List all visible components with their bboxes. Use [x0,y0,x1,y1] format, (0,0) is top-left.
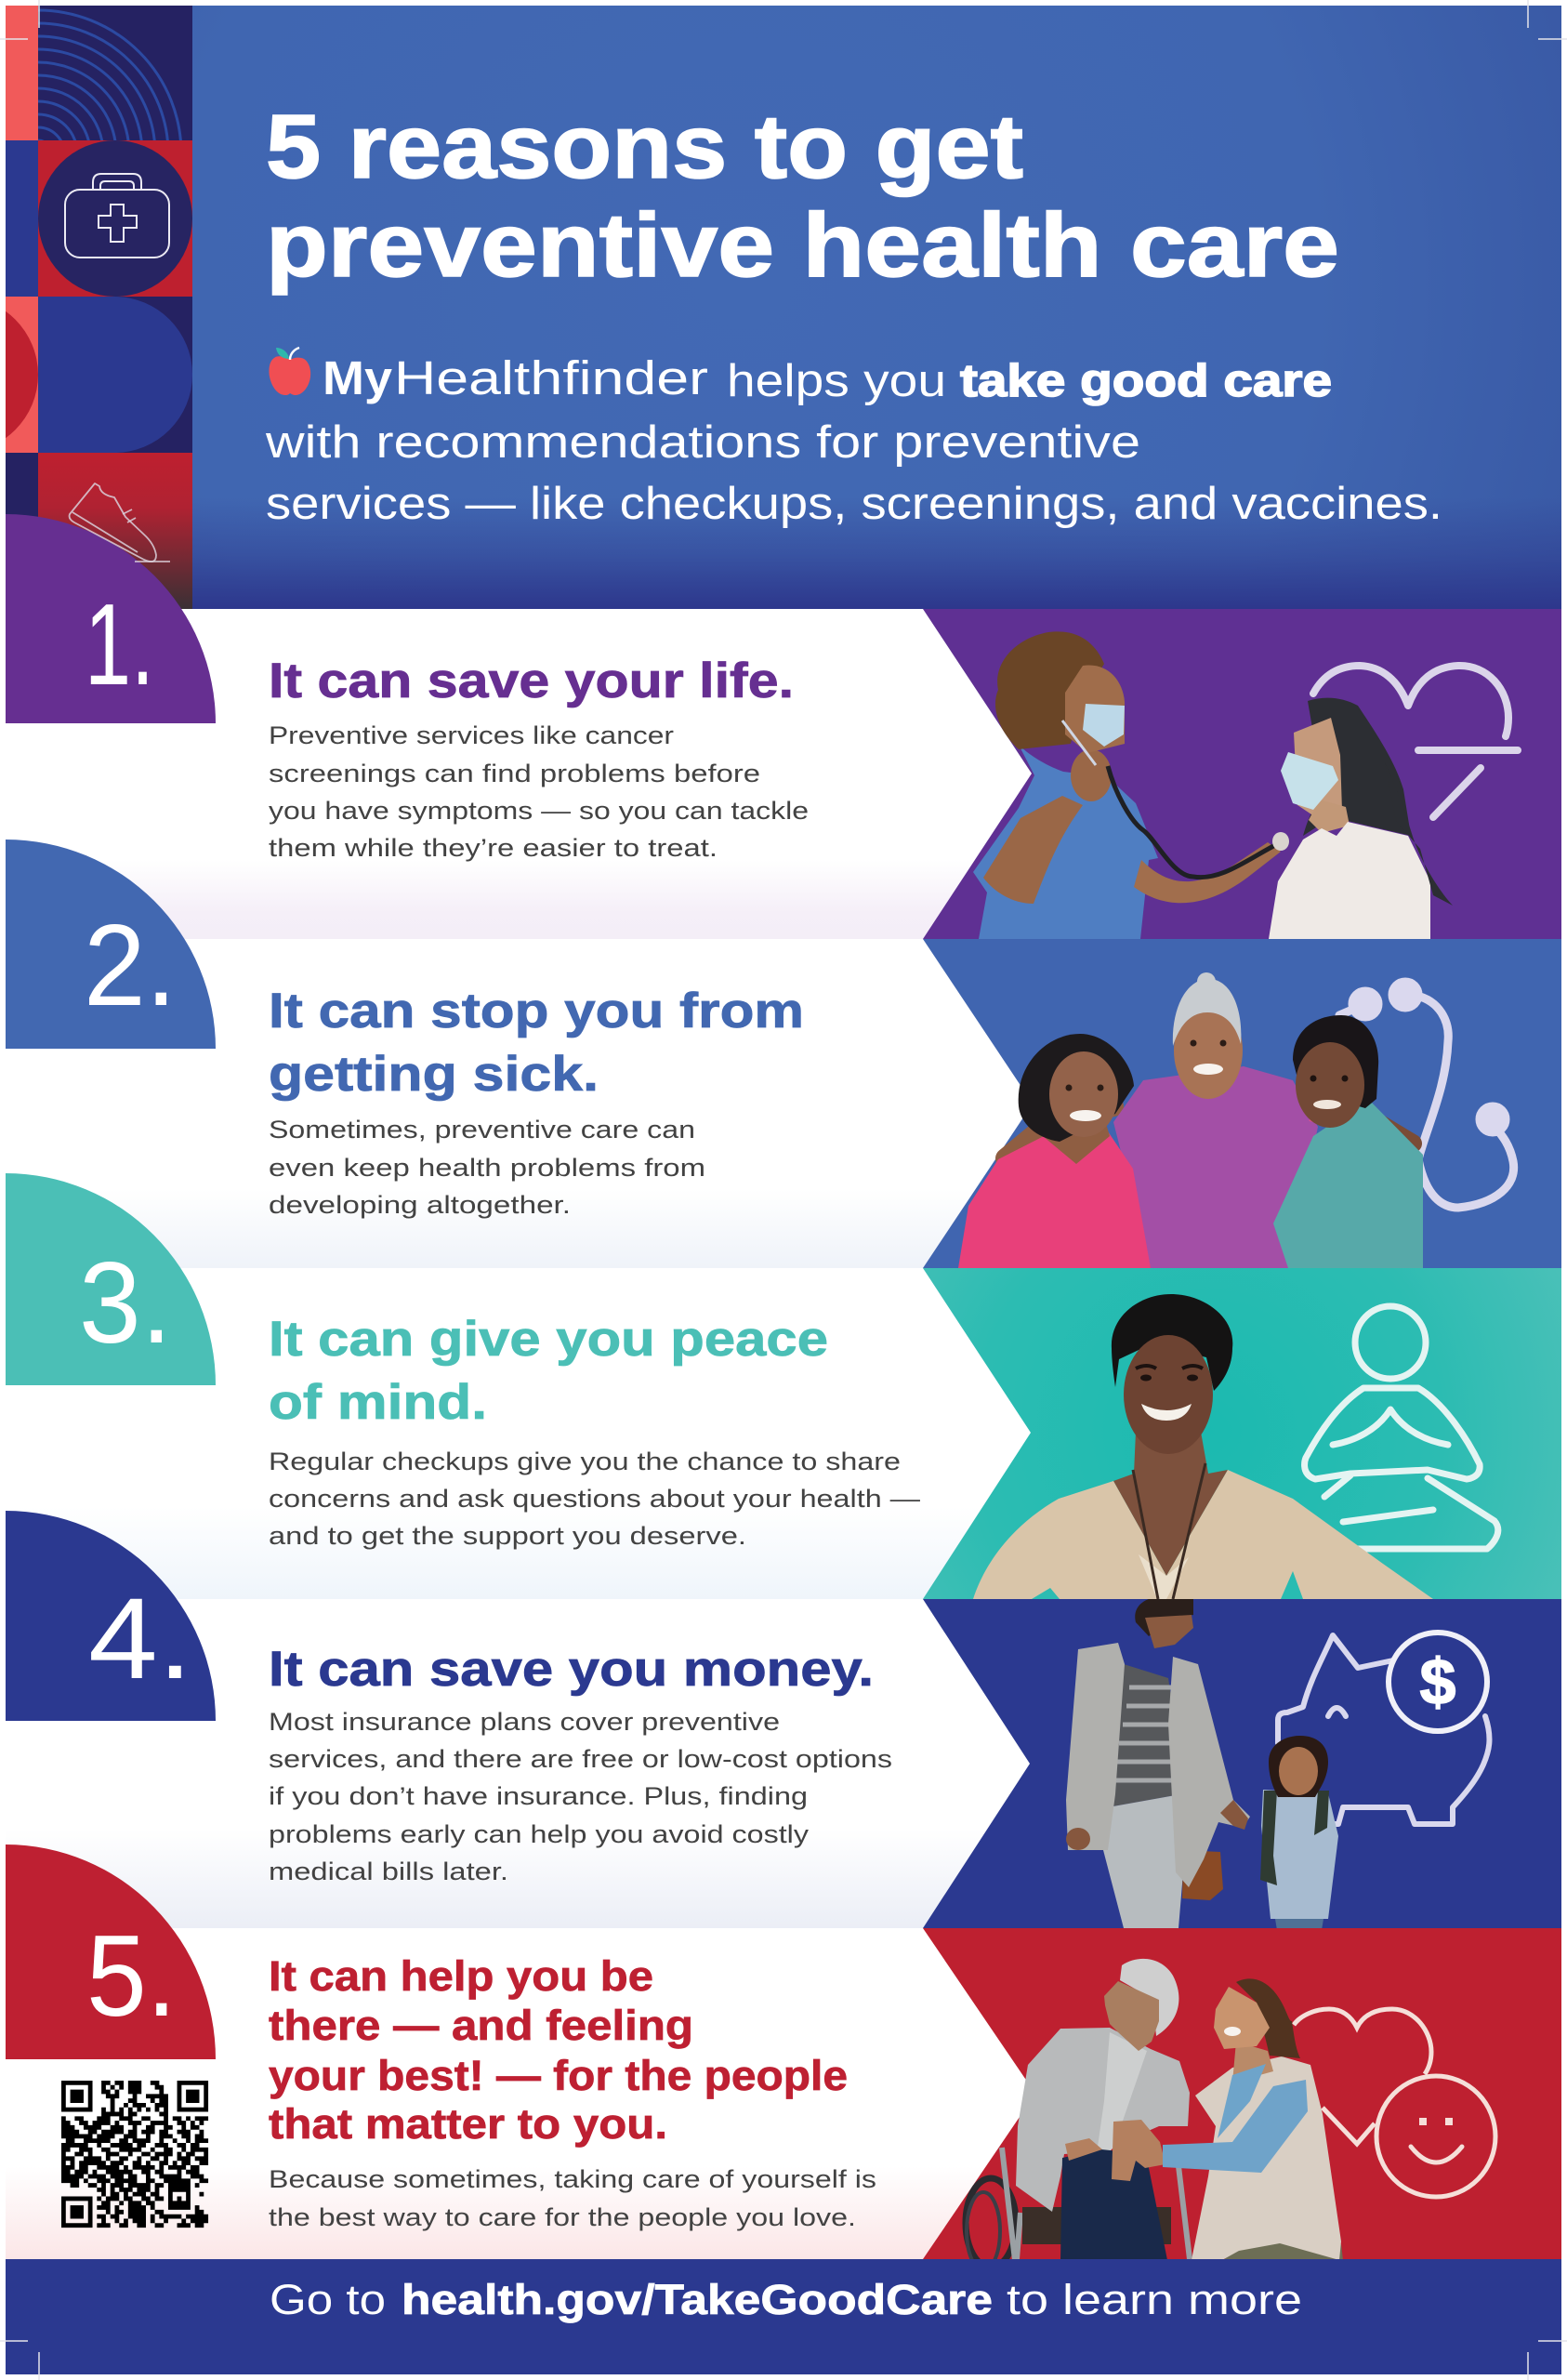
footer bar [6,2259,1561,2374]
heading: It can give you peace [269,1312,828,1367]
header background panel [191,6,1561,609]
body text: developing altogether. [269,1191,571,1219]
body text [269,1116,705,1219]
body text: screenings can find problems before [269,760,760,787]
footer bar: to learn more [1007,2276,1302,2323]
photo: smiling woman [973,1294,1433,1599]
heading [269,984,804,1102]
intro text: My [323,351,393,404]
number badge 4: 4. [88,1575,192,1703]
number badge 1 [6,514,216,723]
heading: that matter to you. [269,2100,667,2148]
icon: heartbeat [1313,666,1518,817]
heading: of mind. [269,1375,487,1430]
body text: Most insurance plans cover preventive [269,1708,780,1736]
number badge 5 [6,1844,216,2059]
body text: if you don’t have insurance. Plus, finding [269,1782,808,1810]
icon: stethoscope [1339,982,1514,1208]
intro text: take good care [960,356,1332,406]
white chevron [6,1928,1035,2259]
icon: dollar coin [1389,1633,1487,1731]
heading [269,1952,848,2148]
intro text: with recommendations for preventive [265,417,1140,468]
white chevron [6,609,1032,939]
body text [269,721,809,862]
body text: the best way to care for the people you love. [269,2203,856,2231]
photo panel: purple [920,609,1561,939]
body text: Sometimes, preventive care can [269,1116,695,1144]
white chevron [6,1599,1030,1928]
number badge 4 [6,1511,216,1721]
photo panel: navy [920,1599,1561,1928]
icon: meditating person [1305,1306,1498,1549]
panel: reason 2 [6,939,1561,1268]
title [266,96,1339,296]
heading: It can save you money. [269,1642,874,1697]
heading: getting sick. [269,1047,599,1102]
number badge 2: 2. [84,902,177,1030]
left mosaic decoration [0,6,192,609]
white chevron [6,1268,1031,1599]
white chevron [6,939,1033,1268]
QR code [61,2081,208,2228]
icon: apple logo [270,348,310,395]
icon: medical kit [65,174,169,258]
body text: medical bills later. [269,1858,508,1885]
number badge 3 [6,1173,216,1385]
icon: heart [1294,2009,1431,2144]
panel: reason 3 [6,1268,1561,1599]
heading: It can stop you from [269,984,804,1038]
photo: caregiver and woman in wheelchair [966,1959,1343,2270]
number badge 2 [6,840,216,1049]
concentric arcs [38,9,182,140]
body text: concerns and ask questions about your health — [269,1485,920,1513]
icon: dollar coin: $ [1420,1646,1455,1718]
body text [269,2165,876,2231]
body text [269,1708,892,1885]
photo panel: teal [920,1268,1561,1599]
icon: running shoe [70,483,170,562]
number badge 1: 1. [85,581,154,709]
number badge 5: 5. [86,1912,177,2041]
panel: reason 4 [6,1596,1561,1930]
photo: nurse and patient [973,631,1453,939]
panel: reason 1 [6,609,1561,939]
heading: It can save your life. [269,654,794,708]
photo: three smiling women [958,972,1423,1268]
icon: smiley [1376,2076,1495,2197]
footer bar: health.gov/TakeGoodCare [402,2276,993,2323]
heading: there — and feeling [269,2002,693,2049]
intro text: helps you [727,356,946,406]
body text [269,1448,920,1550]
title: preventive health care [266,194,1339,296]
intro text [265,351,1442,529]
photo: woman walking with child [1066,1596,1338,1930]
body text: Preventive services like cancer [269,721,674,749]
intro text: services — like checkups, screenings, and vaccines. [266,479,1442,529]
photo panel: blue [920,939,1561,1268]
title: 5 reasons to get [266,96,1023,197]
body text: you have symptoms — so you can tackle [269,797,809,825]
heading [269,1312,828,1430]
body text: Because sometimes, taking care of yourself is [269,2165,876,2193]
body text: even keep health problems from [269,1154,705,1182]
panel: reason 5 [6,1928,1561,2270]
heading: It can help you be [269,1952,653,2000]
body text: Regular checkups give you the chance to share [269,1448,901,1475]
body text: them while they’re easier to treat. [269,834,718,862]
footer bar: Go to [270,2276,386,2323]
number badge 3: 3. [79,1239,172,1368]
body text: services, and there are free or low-cost options [269,1745,892,1773]
heading: your best! — for the people [269,2052,848,2099]
photo panel: red [920,1928,1561,2259]
icon: piggy bank with coin [1278,1635,1489,1824]
intro text: Healthfinder [394,351,708,404]
body text: and to get the support you deserve. [269,1522,746,1550]
body text: problems early can help you avoid costly [269,1820,810,1848]
